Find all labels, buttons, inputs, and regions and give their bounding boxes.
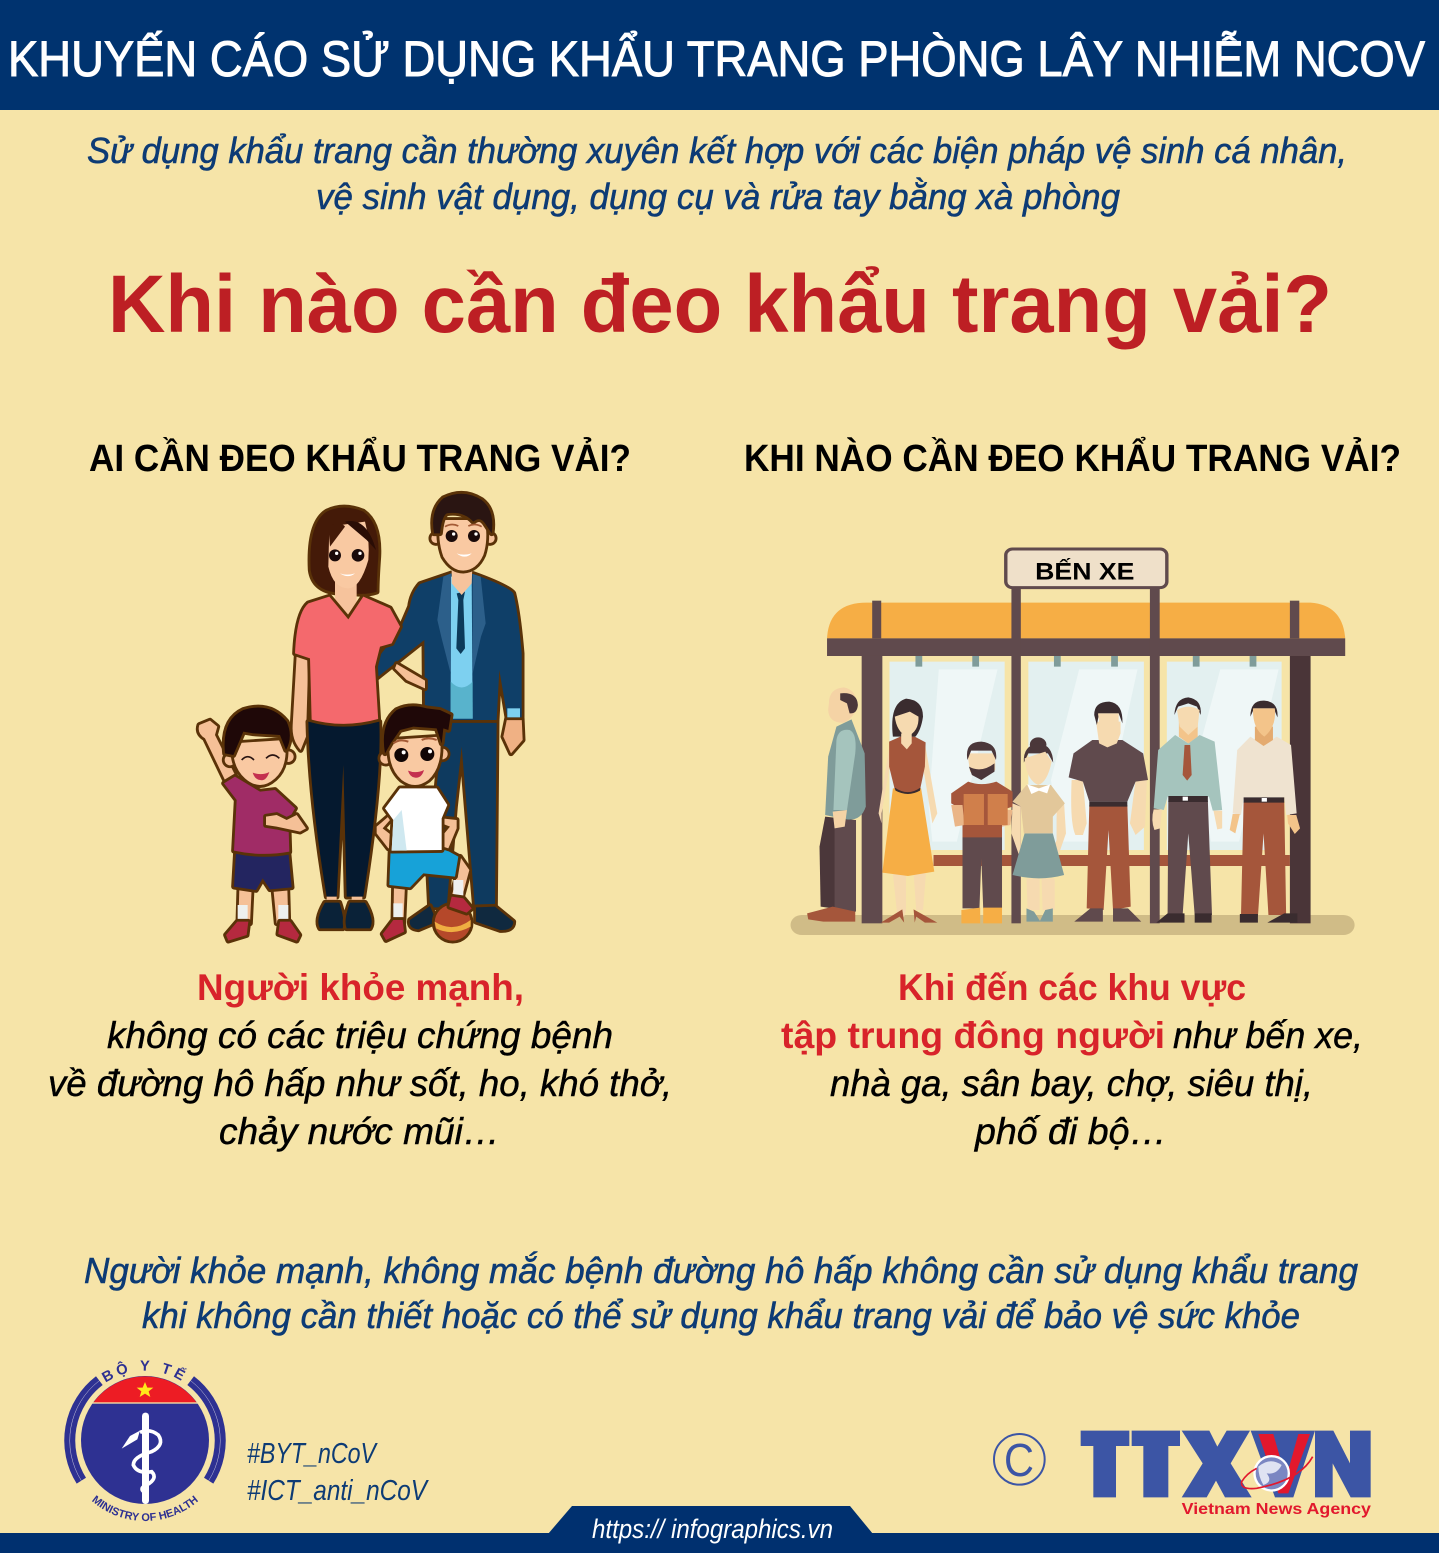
- person: man with tie: [1152, 697, 1222, 923]
- intro text: [87, 130, 1347, 217]
- right column heading: KHI NÀO CẦN ĐEO KHẨU TRANG VẢI?: [744, 435, 1401, 480]
- right body text: nhà ga, sân bay, chợ, siêu thị,: [830, 1063, 1313, 1104]
- left column heading: AI CẦN ĐEO KHẨU TRANG VẢI?: [89, 435, 631, 480]
- logo: TTXVN: [994, 1431, 1372, 1518]
- left highlight: Người khỏe mạnh,: [197, 967, 524, 1008]
- logo: Ministry of Health: [64, 1360, 226, 1522]
- closing note: Người khỏe mạnh, không mắc bệnh đường hô hấp không cần sử dụng khẩu trang: [84, 1250, 1358, 1291]
- right highlight: [781, 967, 1246, 1056]
- boy with ball: [377, 706, 472, 941]
- person: woman in yellow skirt: [879, 699, 937, 923]
- left description: [48, 967, 672, 1152]
- hashtags: #ICT_anti_nCoV: [247, 1475, 429, 1507]
- left body text: không có các triệu chứng bệnh: [107, 1015, 613, 1056]
- ground shadow: [791, 915, 1355, 935]
- person: man in dark shirt: [1069, 702, 1148, 922]
- main heading: Khi nào cần đeo khẩu trang vải?: [108, 259, 1332, 350]
- mother: [293, 507, 425, 928]
- copyright mark: [994, 1434, 1045, 1486]
- header banner: [0, 0, 1439, 110]
- shelter structure: [827, 588, 1345, 923]
- left body text: về đường hô hấp như sốt, ho, khó thở,: [48, 1063, 672, 1104]
- person: woman with bun: [1011, 737, 1066, 922]
- intro text: vệ sinh vật dụng, dụng cụ và rửa tay bằng xà phòng: [316, 176, 1120, 217]
- right highlight: Khi đến các khu vực: [898, 967, 1246, 1008]
- closing note: khi không cần thiết hoặc có thể sử dụng khẩu trang vải để bảo vệ sức khỏe: [142, 1295, 1300, 1336]
- right description: [781, 967, 1363, 1152]
- footer band with website: [0, 1506, 1439, 1553]
- left body text: [48, 1015, 672, 1152]
- left body text: chảy nước mũi…: [219, 1111, 500, 1152]
- person: old man: [807, 687, 866, 922]
- station sign: BẾN XE: [1035, 558, 1134, 585]
- intro text: Sử dụng khẩu trang cần thường xuyên kết hợp với các biện pháp vệ sinh cá nhân,: [87, 130, 1347, 171]
- illustration: family: [199, 494, 523, 941]
- person: bearded man reading: [951, 742, 1013, 923]
- father: [374, 494, 523, 930]
- station sign: [1006, 549, 1167, 588]
- boy with raised arm: [199, 708, 306, 941]
- hashtags: #BYT_nCoV: [247, 1438, 378, 1470]
- copyright mark: C: [1004, 1434, 1034, 1486]
- closing note: [84, 1250, 1358, 1336]
- illustration: bus stop with people: [791, 549, 1355, 935]
- right body text: phố đi bộ…: [974, 1111, 1167, 1152]
- right highlight: tập trung đông người: [781, 1015, 1165, 1056]
- logo: Ministry of Health: BỘ Y TẾ: [101, 1360, 187, 1382]
- right body text: [830, 1015, 1363, 1152]
- logo: Ministry of Health: MINISTRY OF HEALTH: [92, 1495, 198, 1522]
- person: man in beige shirt: [1230, 701, 1300, 923]
- logo: TTXVN: Vietnam News Agency: [1182, 1501, 1372, 1518]
- footer band with website: https:// infographics.vn: [592, 1514, 833, 1544]
- hashtags: [247, 1438, 429, 1507]
- right body text: như bến xe,: [1173, 1015, 1363, 1056]
